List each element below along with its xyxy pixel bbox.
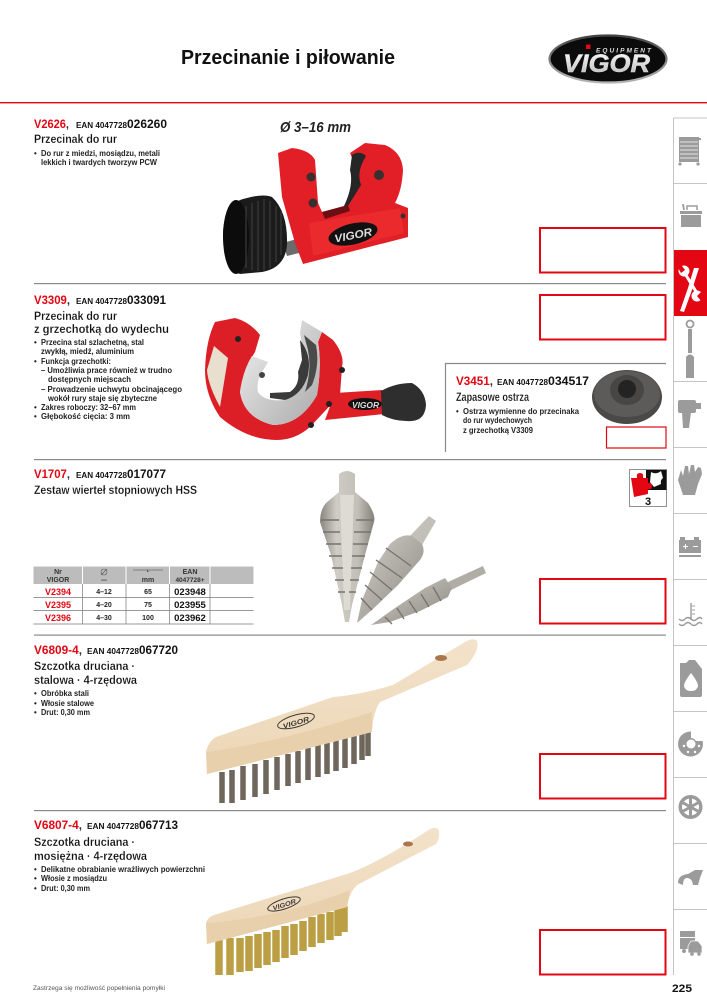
V3309 code and EAN: 033091 bbox=[127, 293, 166, 307]
product photo: brass brush bbox=[206, 828, 439, 975]
V3309 bullets: – Prowadzenie uchwytu obcinającego bbox=[41, 385, 182, 394]
size table: V2394 bbox=[45, 587, 71, 597]
V6809-4 bullets bbox=[34, 689, 95, 717]
price box bbox=[540, 228, 666, 272]
icon: battery bbox=[679, 537, 701, 557]
diameter range label: Ø 3–16 mm bbox=[280, 120, 351, 136]
product photo: steel brush: VIGOR bbox=[282, 716, 310, 731]
V3309 bullets: • bbox=[34, 403, 37, 412]
V3451 code and EAN bbox=[456, 374, 589, 388]
price box bbox=[606, 427, 666, 448]
V6807-4 bullets: • bbox=[34, 865, 37, 874]
size table: 023955 bbox=[174, 600, 207, 611]
V6807-4 bullets: Delikatne obrabianie wrażliwych powierzchni bbox=[41, 865, 205, 874]
logo: Vigor Equipment bbox=[550, 36, 666, 82]
V6809-4 bullets: Włosie stalowe bbox=[41, 699, 95, 708]
divider bbox=[34, 810, 666, 811]
V6809-4 bullets: • bbox=[34, 689, 37, 698]
V2626 bullets bbox=[34, 149, 160, 167]
size table: L bbox=[147, 568, 150, 573]
size table: Nr bbox=[54, 569, 62, 576]
panel frame bbox=[446, 364, 666, 452]
V6807-4 code and EAN: V6807-4, bbox=[34, 818, 82, 832]
size table: 4–20 bbox=[96, 602, 112, 609]
product photo: mini pipe cutter: VIGOR bbox=[334, 226, 373, 245]
V6809-4 code and EAN: V6809-4, bbox=[34, 643, 82, 657]
size table: V2396 bbox=[45, 613, 71, 623]
V3309 bullets: Zakres roboczy: 32–67 mm bbox=[41, 403, 136, 412]
V6807-4 name bbox=[34, 837, 148, 863]
V3309 bullets: zwykłą, miedź, aluminium bbox=[41, 347, 134, 356]
size table: 4–30 bbox=[96, 615, 112, 622]
V3451 bullets: Ostrza wymienne do przecinaka bbox=[463, 407, 580, 416]
V3309 name: Przecinak do rur bbox=[34, 311, 117, 323]
size table: 4–12 bbox=[96, 589, 112, 596]
V6809-4 bullets: Drut: 0,30 mm bbox=[41, 708, 90, 717]
product photo: three step drills bbox=[320, 471, 486, 625]
panel: V6809-4 steel wire brush bbox=[34, 639, 666, 803]
panel: V3451 spare blades bbox=[446, 364, 666, 452]
icon: torque wrench bbox=[686, 320, 694, 378]
page number: 225 bbox=[672, 983, 692, 995]
icon: wrench and screwdriver bbox=[677, 262, 705, 312]
V3309 code and EAN: V3309, bbox=[34, 293, 70, 307]
size table bbox=[34, 566, 254, 624]
V3309 bullets: • bbox=[34, 412, 37, 421]
size table: VIGOR bbox=[47, 577, 69, 584]
V6807-4 code and EAN: 067713 bbox=[139, 818, 178, 832]
V6809-4 name: Szczotka druciana · bbox=[34, 661, 135, 673]
icon: truck and car bbox=[680, 931, 702, 956]
product photo: cutting blade bbox=[592, 370, 662, 424]
V6809-4 code and EAN: EAN 4047728 bbox=[87, 647, 140, 656]
V3309 bullets: Przecina stal szlachetną, stal bbox=[41, 338, 144, 347]
V1707 code and EAN: 017077 bbox=[127, 467, 166, 481]
V6809-4 bullets: • bbox=[34, 699, 37, 708]
V6807-4 name: Szczotka druciana · bbox=[34, 837, 135, 849]
V3451 code and EAN: EAN 4047728 bbox=[497, 378, 549, 387]
V3309 code and EAN bbox=[34, 293, 166, 307]
size table: 4047728+ bbox=[175, 577, 205, 584]
product photo: ratchet cutter: VIGOR bbox=[352, 401, 379, 410]
icon: toolbox bbox=[680, 204, 702, 227]
V1707 name: Zestaw wierteł stopniowych HSS bbox=[34, 485, 197, 497]
size table: 65 bbox=[144, 589, 152, 596]
product photo: mini pipe cutter bbox=[223, 143, 408, 274]
V3309 name: z grzechotką do wydechu bbox=[34, 324, 169, 336]
V3309 bullets: • bbox=[34, 338, 37, 347]
header rule bbox=[0, 102, 707, 103]
icon: wheel bbox=[678, 795, 702, 819]
V6807-4 code and EAN bbox=[34, 818, 178, 832]
logo: Vigor Equipment: EQUIPMENT bbox=[596, 48, 652, 54]
V2626 code and EAN: V2626, bbox=[34, 117, 69, 131]
V3309 bullets: • bbox=[34, 357, 37, 366]
size table: 023948 bbox=[174, 587, 206, 598]
V6807-4 code and EAN: EAN 4047728 bbox=[87, 822, 140, 831]
V3309 bullets: dostępnych miejscach bbox=[48, 375, 131, 384]
V6809-4 bullets: • bbox=[34, 708, 37, 717]
V6809-4 bullets: Obróbka stali bbox=[41, 689, 89, 698]
V6807-4 name: mosiężna · 4-rzędowa bbox=[34, 851, 148, 863]
V6807-4 bullets: • bbox=[34, 874, 37, 883]
V3309 bullets: – Umożliwia prace również w trudno bbox=[41, 366, 172, 375]
V3451 code and EAN: 034517 bbox=[548, 374, 589, 388]
V3309 bullets bbox=[34, 338, 182, 421]
panel: V6807-4 brass wire brush bbox=[34, 818, 666, 975]
V3451 bullets: z grzechotką V3309 bbox=[463, 426, 534, 435]
V3451 name: Zapasowe ostrza bbox=[456, 392, 529, 404]
V2626 code and EAN: EAN 4047728 bbox=[76, 121, 128, 130]
V6807-4 bullets: Włosie z mosiądzu bbox=[41, 874, 107, 883]
product photo: brass brush: VIGOR bbox=[272, 898, 297, 912]
logo: Vigor Equipment: VIGOR bbox=[563, 50, 650, 78]
product photo: steel brush bbox=[206, 639, 478, 803]
V3451 bullets bbox=[456, 407, 580, 435]
divider bbox=[34, 634, 666, 636]
price box bbox=[540, 930, 666, 974]
V2626 bullets: • bbox=[34, 149, 37, 158]
V6807-4 bullets: Drut: 0,30 mm bbox=[41, 884, 90, 893]
icon: car body bbox=[678, 870, 703, 885]
V2626 bullets: Do rur z miedzi, mosiądzu, metali bbox=[41, 149, 160, 158]
product photo: ratchet cutter bbox=[205, 318, 426, 440]
V1707 code and EAN: EAN 4047728 bbox=[76, 471, 128, 480]
V6809-4 name bbox=[34, 661, 138, 687]
V3309 code and EAN: EAN 4047728 bbox=[76, 297, 128, 306]
size table: 100 bbox=[142, 615, 154, 622]
size table: mm bbox=[101, 578, 107, 582]
V3451 bullets: do rur wydechowych bbox=[463, 416, 532, 425]
size table: EAN bbox=[183, 569, 197, 576]
price box bbox=[540, 295, 666, 340]
size table: mm bbox=[142, 577, 154, 584]
size table: 75 bbox=[144, 602, 152, 609]
price box bbox=[540, 754, 666, 798]
V2626 bullets: lekkich i twardych tworzyw PCW bbox=[41, 158, 158, 167]
V6809-4 code and EAN: 067720 bbox=[139, 643, 178, 657]
V2626 code and EAN bbox=[34, 117, 167, 131]
V2626 code and EAN: 026260 bbox=[127, 117, 167, 131]
page title: Przecinanie i piłowanie bbox=[181, 47, 395, 69]
V3309 bullets: Głębokość cięcia: 3 mm bbox=[41, 412, 130, 421]
V3451 code and EAN: V3451, bbox=[456, 374, 493, 388]
size table: V2395 bbox=[45, 600, 71, 610]
icon: gloves bbox=[678, 465, 702, 495]
V3309 name bbox=[34, 311, 169, 336]
active tab background bbox=[674, 250, 707, 316]
panel: V3309 exhaust pipe cutter bbox=[34, 293, 666, 440]
size table: 023962 bbox=[174, 613, 206, 624]
V1707 code and EAN: V1707, bbox=[34, 467, 70, 481]
divider bbox=[34, 459, 666, 460]
price box bbox=[540, 579, 666, 624]
panel: category sidebar bbox=[674, 118, 707, 975]
V6807-4 bullets bbox=[34, 865, 205, 893]
V2626 name: Przecinak do rur bbox=[34, 134, 117, 146]
icon: impact wrench bbox=[678, 400, 701, 428]
V3309 bullets: wokół rury staje się zbyteczne bbox=[47, 394, 158, 403]
icon: oil bottle bbox=[680, 660, 702, 697]
V1707 code and EAN bbox=[34, 467, 166, 481]
icon: puzzle, 3 pieces bbox=[630, 470, 666, 508]
footer note: Zastrzega się możliwość popełnienia pomyłki bbox=[33, 985, 165, 992]
V6807-4 bullets: • bbox=[34, 884, 37, 893]
icon: puzzle, 3 pieces: 3 bbox=[645, 496, 651, 508]
icon: tool cart bbox=[678, 137, 701, 166]
divider bbox=[34, 283, 666, 284]
V6809-4 name: stalowa · 4-rzędowa bbox=[34, 675, 138, 687]
V3309 bullets: Funkcja grzechotki: bbox=[41, 357, 111, 366]
icon: coolant temperature bbox=[679, 603, 702, 626]
V6809-4 code and EAN bbox=[34, 643, 178, 657]
panel: V1707 step drill set bbox=[34, 467, 666, 625]
icon: brake disc bbox=[678, 732, 703, 756]
panel: V2626 pipe cutter bbox=[34, 117, 666, 274]
V3451 bullets: • bbox=[456, 407, 459, 416]
